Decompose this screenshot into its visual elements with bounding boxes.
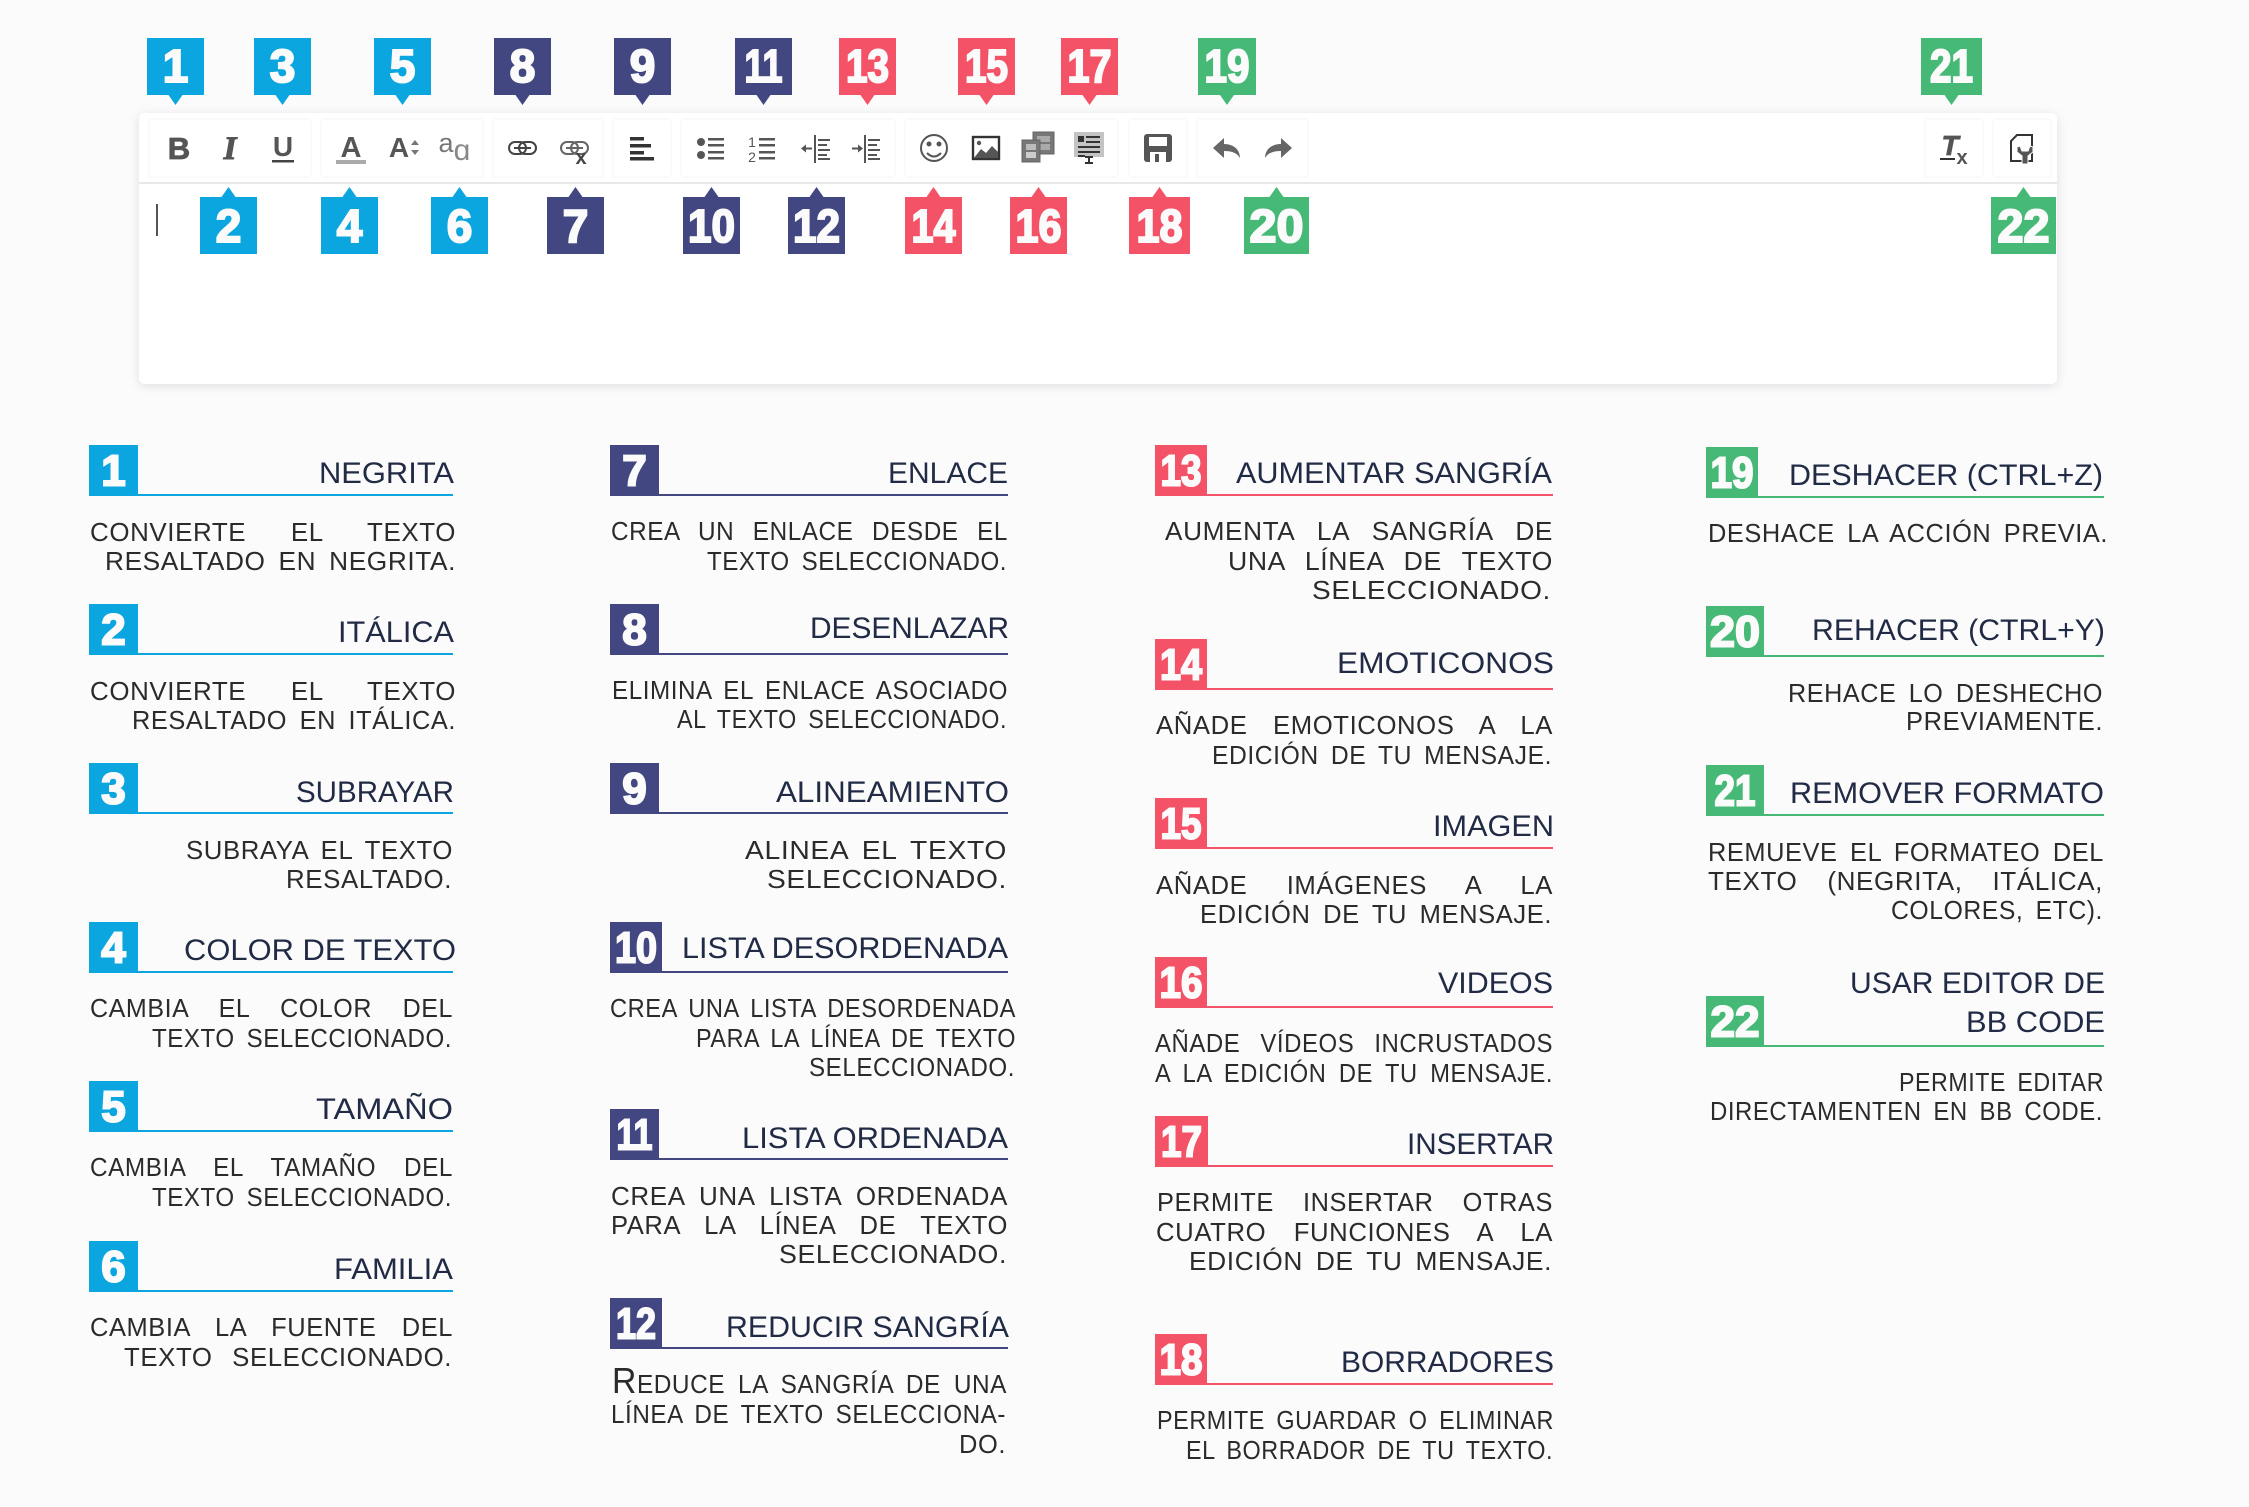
entry 11: lista ordenada: 11 [616,1110,652,1160]
entry 18: borradores [1155,1334,1554,1465]
entry 21: remover formato: REMUEVE EL FORMATEO DEL [1708,837,2104,867]
icon: unlink: x [575,147,587,169]
entry 22: usar editor de bb code: USAR EDITOR DE [1850,967,2105,1000]
marker 2 [200,187,257,254]
icon: save [1144,134,1172,162]
icon: ordered list: 2 [748,149,756,165]
entry 11: lista ordenada [610,1109,1008,1269]
entry 12: reducir sangria: LÍNEA DE TEXTO SELECCIONA- [611,1399,1006,1429]
marker 18 [1129,187,1190,254]
entry 16: videos: 16 [1160,958,1202,1008]
marker 15: 15 [965,40,1008,92]
entry 6: familia: CAMBIA LA FUENTE DEL [90,1312,453,1342]
entry 3: subrayar [89,763,454,894]
icon: bb code source [2011,135,2033,164]
entry 21: remover formato [1706,765,2104,925]
entry 20: rehacer: REHACE LO DESHECHO [1788,678,2103,708]
entry 13: aumentar sangria: AUMENTAR SANGRÍA [1236,457,1552,490]
entry 11: lista ordenada: SELECCIONADO. [779,1239,1007,1269]
entry 16: videos: AÑADE VÍDEOS INCRUSTADOS [1155,1028,1553,1058]
entry 19: deshacer: 19 [1710,448,1754,498]
icon: video [1022,132,1054,162]
marker 16: 16 [1016,200,1062,252]
entry 4: color de texto: CAMBIA EL COLOR DEL [90,993,453,1023]
entry 14: emoticonos: 14 [1160,640,1202,690]
entry 5: tamano: TEXTO SELECCIONADO. [152,1182,452,1212]
entry 21: remover formato: 21 [1714,766,1756,816]
icon: link [509,142,536,154]
entry 11: lista ordenada: CREA UNA LISTA ORDENADA [611,1181,1008,1211]
entry 18: borradores: BORRADORES [1341,1346,1554,1379]
entry 2: italica [89,604,456,735]
entry 2: italica: ITÁLICA [338,616,454,649]
marker 15 [958,38,1015,105]
entry 7: enlace: 7 [622,446,647,496]
icon: insert template [1074,132,1104,163]
icon: font size: A [389,132,409,163]
entry 2: italica: CONVIERTE EL TEXTO [90,676,456,706]
entry 8: desenlazar: AL TEXTO SELECCIONADO. [677,704,1007,734]
entry 7: enlace: CREA UN ENLACE DESDE EL [611,516,1008,546]
entry 11: lista ordenada: LISTA ORDENADA [742,1122,1008,1155]
marker 8 [494,38,551,105]
marker 12: 12 [793,200,840,252]
entry 16: videos [1155,957,1553,1088]
entry 17: insertar: INSERTAR [1407,1128,1554,1161]
entry 9: alineamiento: 9 [622,764,647,814]
icon: outdent [801,135,830,163]
entry 5: tamano: CAMBIA EL TAMAÑO DEL [90,1152,453,1182]
entry 20: rehacer: 20 [1710,608,1760,656]
marker 11 [735,38,792,105]
icon: remove format: x [1956,147,1968,169]
entry 13: aumentar sangria [1155,445,1553,605]
icon: undo [1213,138,1240,158]
icon: text color: A [341,132,362,164]
entry 5: tamano: 5 [101,1082,126,1132]
icon: ordered list: 1 [748,134,756,150]
marker 14: 14 [912,200,956,252]
icon: ordered list [748,134,775,165]
entry 8: desenlazar: ELIMINA EL ENLACE ASOCIADO [612,675,1008,705]
entry 3: subrayar: RESALTADO. [286,864,452,894]
entry 8: desenlazar: 8 [622,606,647,654]
marker 16 [1010,187,1067,254]
entry 10: lista desordenada: SELECCIONADO. [809,1052,1015,1082]
panel: editor window [139,113,2057,384]
entry 18: borradores: PERMITE GUARDAR O ELIMINAR [1157,1405,1554,1435]
entry 5: tamano: TAMAÑO [316,1092,453,1126]
marker 17 [1061,38,1118,105]
entry 18: borradores: 18 [1160,1336,1202,1384]
entry 17: insertar: 17 [1161,1118,1202,1166]
marker 12 [788,187,845,254]
icon: unlink [561,142,588,169]
icon: emoticon [921,135,947,161]
entry 19: deshacer: DESHACE LA ACCIÓN PREVIA. [1708,518,2108,548]
entry 1: negrita: RESALTADO EN NEGRITA. [105,546,456,576]
entry 12: reducir sangria: REDUCIR SANGRÍA [726,1311,1009,1344]
entry 13: aumentar sangria: AUMENTA LA SANGRÍA DE [1165,516,1553,546]
entry 6: familia [89,1241,453,1372]
marker 1 [147,38,204,105]
icon: font family: ɑ [454,134,470,167]
entry 2: italica: RESALTADO EN ITÁLICA. [132,705,456,735]
icon: text color [336,132,366,164]
entry 16: videos: A LA EDICIÓN DE TU MENSAJE. [1155,1058,1553,1088]
icon: image [973,137,999,159]
entry 3: subrayar: 3 [101,764,126,814]
entry 13: aumentar sangria: SELECCIONADO. [1312,575,1551,605]
entry 13: aumentar sangria: 13 [1160,446,1202,496]
entry 22: usar editor de bb code [1706,967,2105,1126]
entry 4: color de texto: TEXTO SELECCIONADO. [152,1023,452,1053]
icon: unordered list [697,138,724,160]
entry 20: rehacer: PREVIAMENTE. [1906,706,2103,736]
marker 17: 17 [1068,40,1112,92]
entry 1: negrita: CONVIERTE EL TEXTO [90,517,456,547]
entry 21: remover formato: REMOVER FORMATO [1790,777,2104,810]
entry 11: lista ordenada: PARA LA LÍNEA DE TEXTO [611,1210,1008,1240]
icon: font size [389,132,419,163]
entry 4: color de texto: 4 [101,924,126,972]
entry 16: videos: VIDEOS [1438,967,1553,1000]
entry 22: usar editor de bb code: PERMITE EDITAR [1899,1067,2104,1097]
icon: redo [1265,138,1292,158]
entry 8: desenlazar: DESENLAZAR [810,612,1009,645]
entry 19: deshacer: DESHACER (CTRL+Z) [1789,459,2103,492]
entry 10: lista desordenada: 10 [615,924,657,972]
entry 1: negrita: 1 [101,446,126,496]
entry 15: imagen [1155,798,1554,929]
entry 7: enlace: ENLACE [888,457,1008,490]
entry 6: familia: FAMILIA [334,1253,453,1286]
marker 21 [1921,38,1982,105]
entry 14: emoticonos: AÑADE EMOTICONOS A LA [1156,710,1553,740]
marker 4 [321,187,378,254]
entry 10: lista desordenada: PARA LA LÍNEA DE TEXTO [696,1023,1016,1053]
entry 2: italica: 2 [101,606,126,654]
entry 15: imagen: AÑADE IMÁGENES A LA [1156,870,1553,900]
marker 18: 18 [1136,200,1182,252]
entry 1: negrita: NEGRITA [319,457,454,490]
icon: font family [438,128,470,167]
marker 10: 10 [688,200,735,252]
entry 8: desenlazar [610,604,1009,734]
entry 22: usar editor de bb code: BB CODE [1966,1006,2105,1039]
marker 19: 19 [1204,40,1250,92]
marker 11: 11 [744,40,782,92]
marker 20: 20 [1250,200,1304,252]
entry 3: subrayar: SUBRAYA EL TEXTO [186,835,453,865]
icon: font family: a [438,128,454,158]
marker 4: 4 [337,200,363,252]
entry 1: negrita [89,445,456,576]
entry 18: borradores: EL BORRADOR DE TU TEXTO. [1186,1435,1553,1465]
marker 3: 3 [270,40,295,92]
marker 8: 8 [510,40,535,92]
entry 10: lista desordenada [610,922,1016,1082]
marker 6: 6 [447,200,472,252]
entry 20: rehacer: REHACER (CTRL+Y) [1812,614,2105,647]
entry 6: familia: 6 [101,1242,126,1292]
entry 7: enlace [610,445,1008,576]
marker 14 [905,187,962,254]
entry 12: reducir sangria: 12 [616,1300,656,1348]
entry 4: color de texto [89,922,456,1053]
icon: remove format: T [1941,130,1961,161]
entry 21: remover formato: TEXTO (NEGRITA, ITÁLICA, [1708,866,2103,896]
entry 7: enlace: TEXTO SELECCIONADO. [707,546,1007,576]
marker 22: 22 [1998,200,2050,252]
entry 12: reducir sangria: REDUCE LA SANGRÍA DE UNA [612,1360,1007,1401]
marker 7 [547,187,604,254]
marker 5: 5 [390,40,415,92]
icon: remove format [1940,130,1968,169]
icon: align [630,137,654,160]
entry 19: deshacer [1706,447,2108,548]
entry 14: emoticonos [1155,639,1554,770]
marker 13: 13 [846,40,889,92]
marker 13 [839,38,896,105]
icon: indent [852,135,880,163]
entry 9: alineamiento [610,763,1009,894]
marker 21: 21 [1930,40,1973,92]
entry 5: tamano [89,1081,453,1212]
icon: underline: U [273,131,293,162]
entry 15: imagen: IMAGEN [1433,810,1554,843]
entry 20: rehacer [1706,606,2105,736]
entry 10: lista desordenada: CREA UNA LISTA DESORDENADA [610,993,1016,1023]
entry 9: alineamiento: SELECCIONADO. [767,864,1007,894]
icon: italic: I [223,131,238,167]
entry 4: color de texto: COLOR DE TEXTO [184,934,456,967]
icon: bold: B [168,131,190,166]
marker 7: 7 [563,200,588,252]
marker 2: 2 [216,200,241,252]
entry 17: insertar: EDICIÓN DE TU MENSAJE. [1189,1246,1552,1276]
entry 12: reducir sangria: DO. [959,1429,1006,1459]
entry 22: usar editor de bb code: DIRECTAMENTEN EN BB CODE. [1710,1096,2103,1126]
entry 12: reducir sangria [610,1298,1009,1459]
marker 9: 9 [630,40,655,92]
entry 14: emoticonos: EDICIÓN DE TU MENSAJE. [1212,740,1552,770]
marker 5 [374,38,431,105]
entry 15: imagen: EDICIÓN DE TU MENSAJE. [1200,899,1552,929]
entry 17: insertar: CUATRO FUNCIONES A LA [1156,1217,1553,1247]
marker 6 [431,187,488,254]
entry 21: remover formato: COLORES, ETC). [1891,895,2103,925]
entry 9: alineamiento: ALINEA EL TEXTO [745,835,1007,865]
marker 10 [683,187,740,254]
entry 22: usar editor de bb code: 22 [1710,998,1760,1046]
entry 17: insertar [1155,1116,1554,1276]
entry 10: lista desordenada: LISTA DESORDENADA [682,932,1008,965]
marker 3 [254,38,311,105]
entry 9: alineamiento: ALINEAMIENTO [776,776,1009,809]
marker 20 [1244,187,1309,254]
entry 17: insertar: PERMITE INSERTAR OTRAS [1157,1187,1553,1217]
entry 14: emoticonos: EMOTICONOS [1337,647,1554,680]
marker 9 [614,38,671,105]
entry 15: imagen: 15 [1160,800,1202,848]
marker 1: 1 [163,40,188,92]
entry 13: aumentar sangria: UNA LÍNEA DE TEXTO [1228,546,1553,576]
entry 6: familia: TEXTO SELECCIONADO. [124,1342,452,1372]
marker 19 [1198,38,1256,105]
marker 22 [1991,187,2056,254]
entry 3: subrayar: SUBRAYAR [296,776,454,809]
